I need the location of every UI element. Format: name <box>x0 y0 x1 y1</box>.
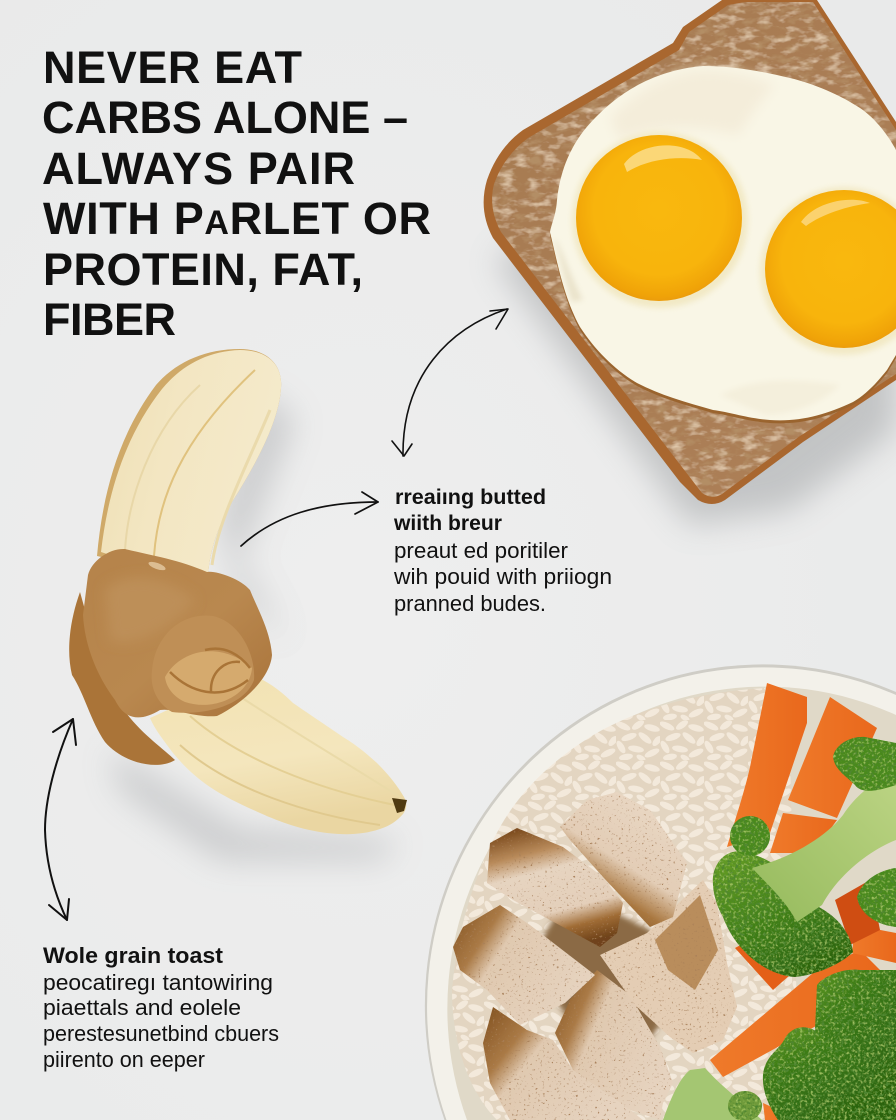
peanut butter dollop <box>152 616 254 713</box>
peanut butter <box>83 549 272 717</box>
banana upper half <box>97 349 281 578</box>
arrow: left double-headed <box>45 719 76 920</box>
peanut butter drip <box>69 592 175 765</box>
arrow: toast callout double-headed <box>392 309 508 456</box>
callout: whole grain toast text: piaettals and eolele <box>43 995 241 1020</box>
callout: whole grain toast text: Wole grain toast <box>43 943 224 968</box>
title: PROTEIN, FAT, <box>43 244 363 295</box>
callout: whole grain toast text: peocatiregı tantowiring <box>43 970 273 995</box>
broccoli floret top right <box>833 737 896 791</box>
banana lower half <box>150 677 407 834</box>
callout: whole grain toast text <box>43 943 279 1072</box>
callout: whole grain toast text: perestesunetbind cbuers <box>43 1021 279 1046</box>
callout: peanut butter text <box>393 485 612 616</box>
chicken gaps shadow <box>530 890 675 1040</box>
callout: peanut butter text: preaut ed poritiler <box>394 538 568 563</box>
illustration: banana with peanut butter <box>69 349 407 860</box>
illustration: toast with fried eggs <box>484 0 896 525</box>
egg yolk right <box>760 187 896 355</box>
illustration: chicken rice bowl <box>425 664 896 1120</box>
title <box>42 42 431 345</box>
broccoli floret center <box>713 772 896 977</box>
broccoli floret bottom right <box>763 970 896 1120</box>
callout: peanut butter text: wih pouid with priiogn <box>393 564 612 589</box>
callout: peanut butter text: pranned budes. <box>394 591 546 616</box>
bread slice <box>484 0 896 504</box>
callout: whole grain toast text: piirento on eeper <box>43 1047 205 1072</box>
chicken slices <box>453 792 737 1120</box>
arrow: banana to callout <box>241 492 378 546</box>
title: ALWAYS PAIR <box>42 143 355 194</box>
title: FIBER <box>43 294 176 345</box>
broccoli floret right <box>857 868 896 927</box>
broccoli stem pieces <box>663 1068 762 1120</box>
egg white <box>550 66 896 423</box>
title: WITH PARLET OR <box>43 193 431 244</box>
rice <box>452 688 800 1120</box>
title: NEVER EAT <box>43 42 302 93</box>
callout: peanut butter text: rreaiıng butted <box>395 485 546 509</box>
bowl <box>425 664 896 1120</box>
toast shadow <box>495 200 896 525</box>
carrots <box>710 683 896 1120</box>
egg yolk left <box>572 132 748 308</box>
callout: peanut butter text: wiith breur <box>393 511 503 535</box>
banana shadow <box>110 390 400 860</box>
title: CARBS ALONE – <box>42 92 408 143</box>
